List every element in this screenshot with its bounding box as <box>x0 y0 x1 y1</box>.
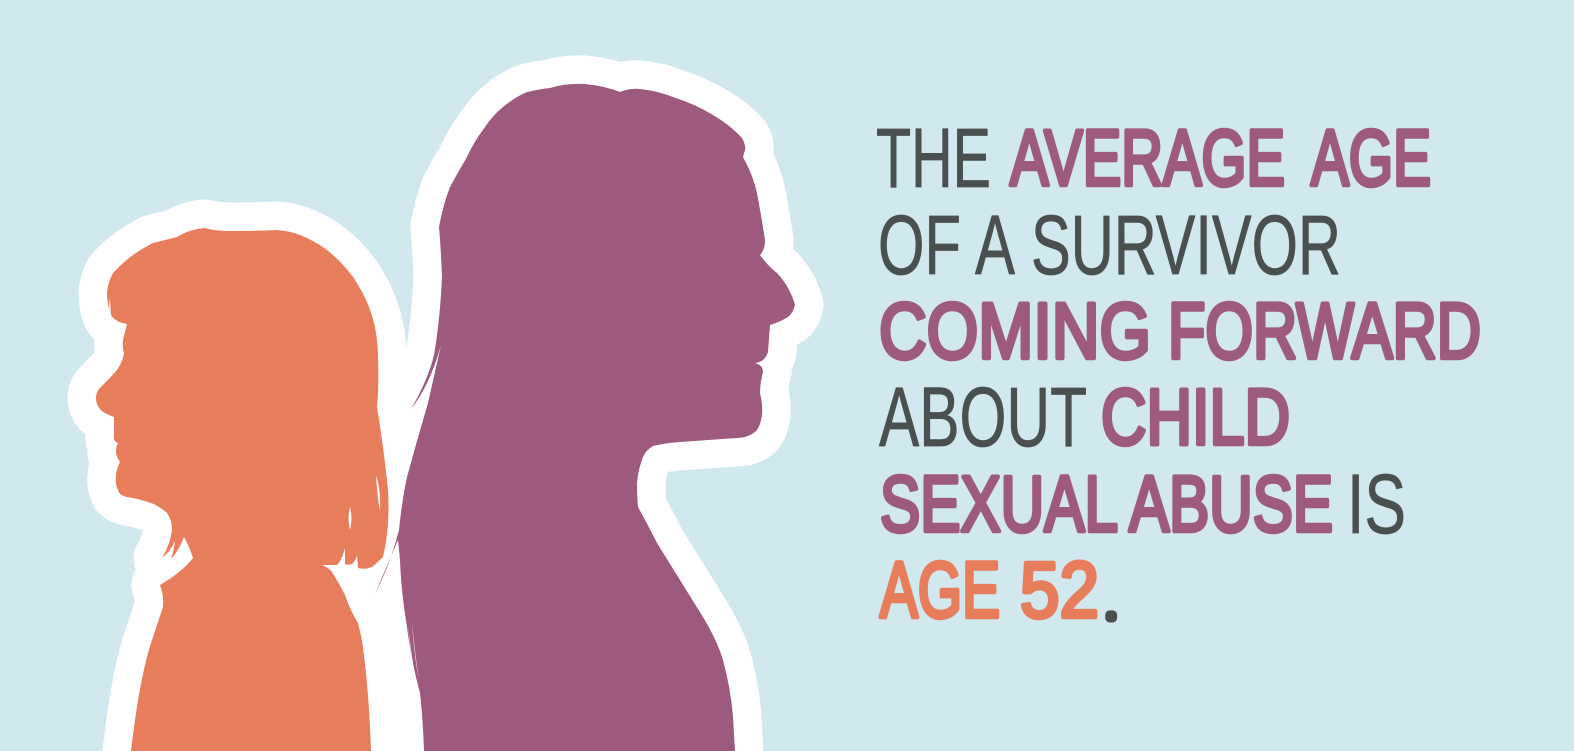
statement text <box>876 111 1481 634</box>
line 1: AVERAGE <box>1010 113 1285 202</box>
line 5: SEXUAL <box>880 459 1118 548</box>
line 5 <box>880 457 1406 551</box>
line 5: ABUSE <box>1129 459 1333 548</box>
line 2: OF <box>878 198 961 292</box>
line 3 <box>879 286 1481 375</box>
line 1 <box>876 111 1431 205</box>
line 6: age 52: 52 <box>1020 545 1099 634</box>
line 2: A <box>975 198 1015 292</box>
silhouette: child in orange <box>96 228 388 751</box>
line 6: age 52: . <box>1107 592 1115 625</box>
line 1: THE <box>876 111 991 205</box>
line 1: AGE <box>1311 113 1431 202</box>
line 2 <box>878 198 1341 292</box>
line 5: IS <box>1347 457 1406 551</box>
silhouette: adult survivor in purple <box>375 84 795 751</box>
line 2: SURVIVOR <box>1031 198 1341 292</box>
line 4: ABOUT <box>879 370 1087 464</box>
line 3: COMING <box>879 286 1151 375</box>
line 4: CHILD <box>1101 372 1290 461</box>
white outline behind silhouettes <box>96 84 795 751</box>
line 6: age 52: AGE <box>880 545 1000 634</box>
line 3: FORWARD <box>1168 286 1481 375</box>
